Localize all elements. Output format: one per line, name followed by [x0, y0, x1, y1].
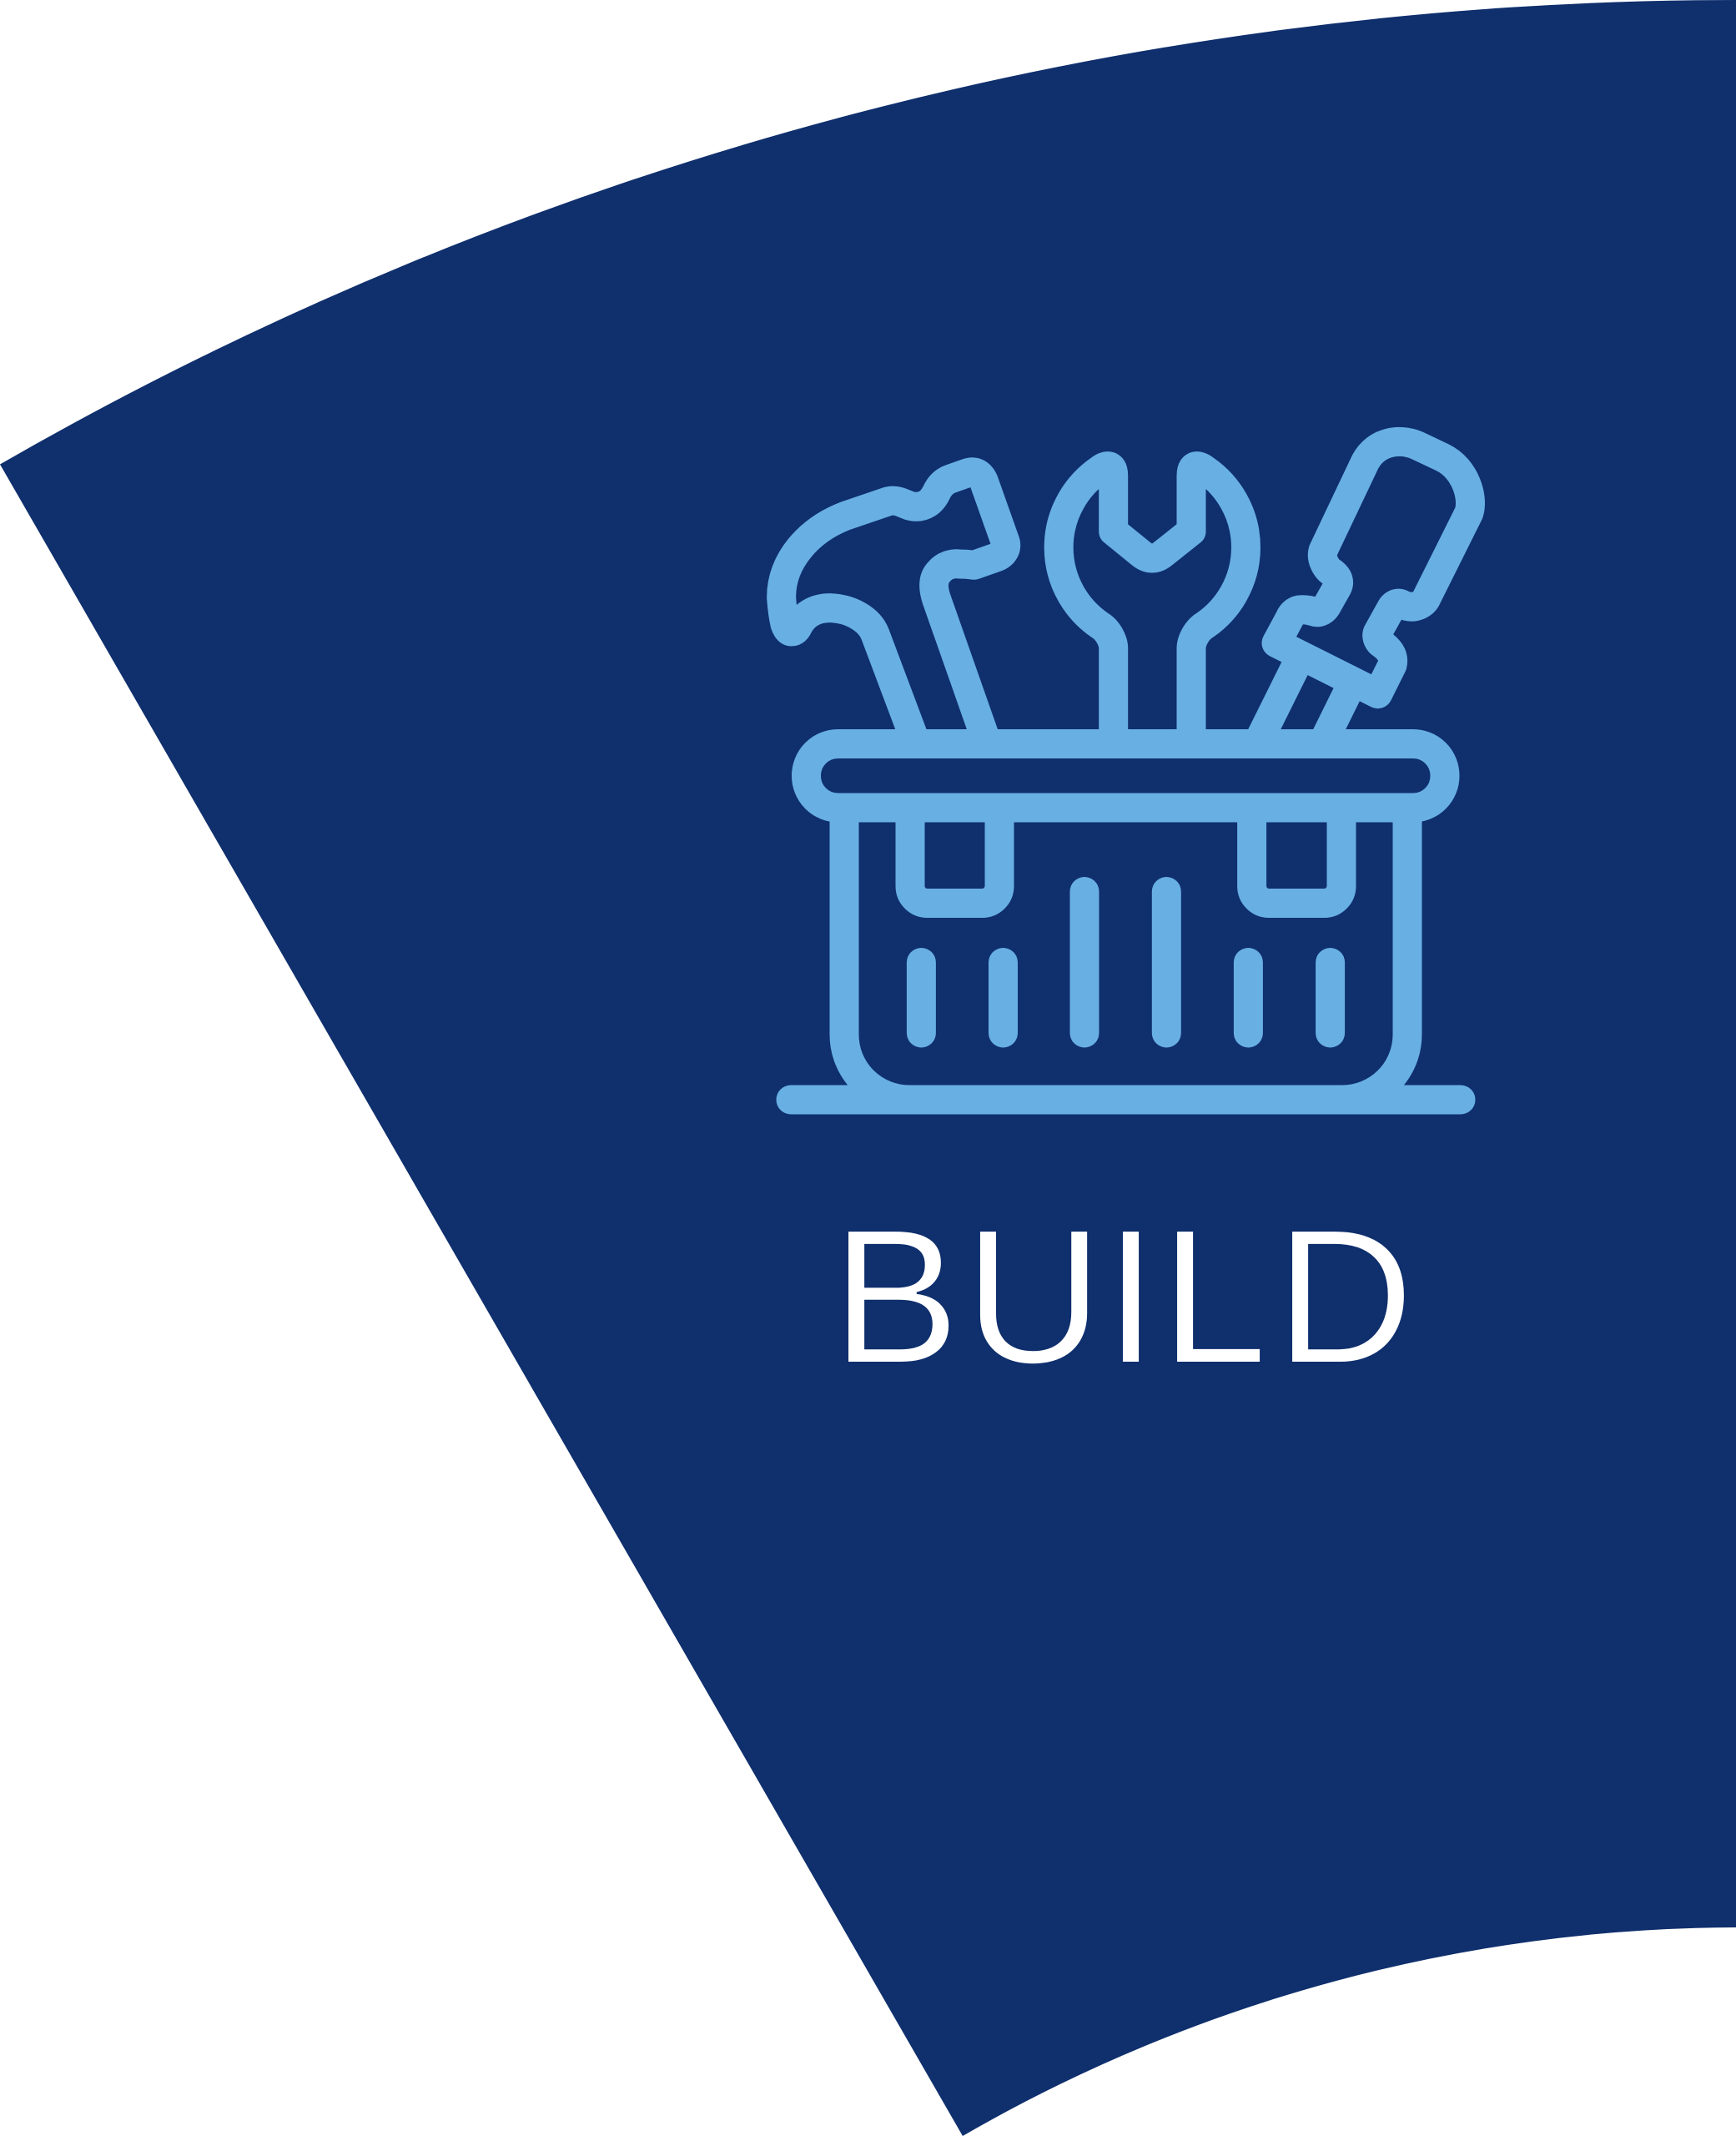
heading: BUILD: BUILD: [832, 1189, 1414, 1403]
icon: toolbox with tools: [782, 441, 1471, 1100]
icon: ground line: [791, 1085, 1461, 1115]
icon: screwdriver handle: [1276, 441, 1471, 694]
icon: left latch: [910, 808, 999, 903]
icon: toolbox lid: [806, 744, 1445, 808]
icon: right latch: [1252, 808, 1341, 903]
icon: wrench: [1059, 466, 1245, 738]
icon: screwdriver shaft: [1260, 656, 1353, 738]
icon: hammer: [782, 472, 1006, 738]
icon: toolbox body: [844, 808, 1407, 1100]
icon: box ventilation bars: [921, 891, 1331, 1033]
